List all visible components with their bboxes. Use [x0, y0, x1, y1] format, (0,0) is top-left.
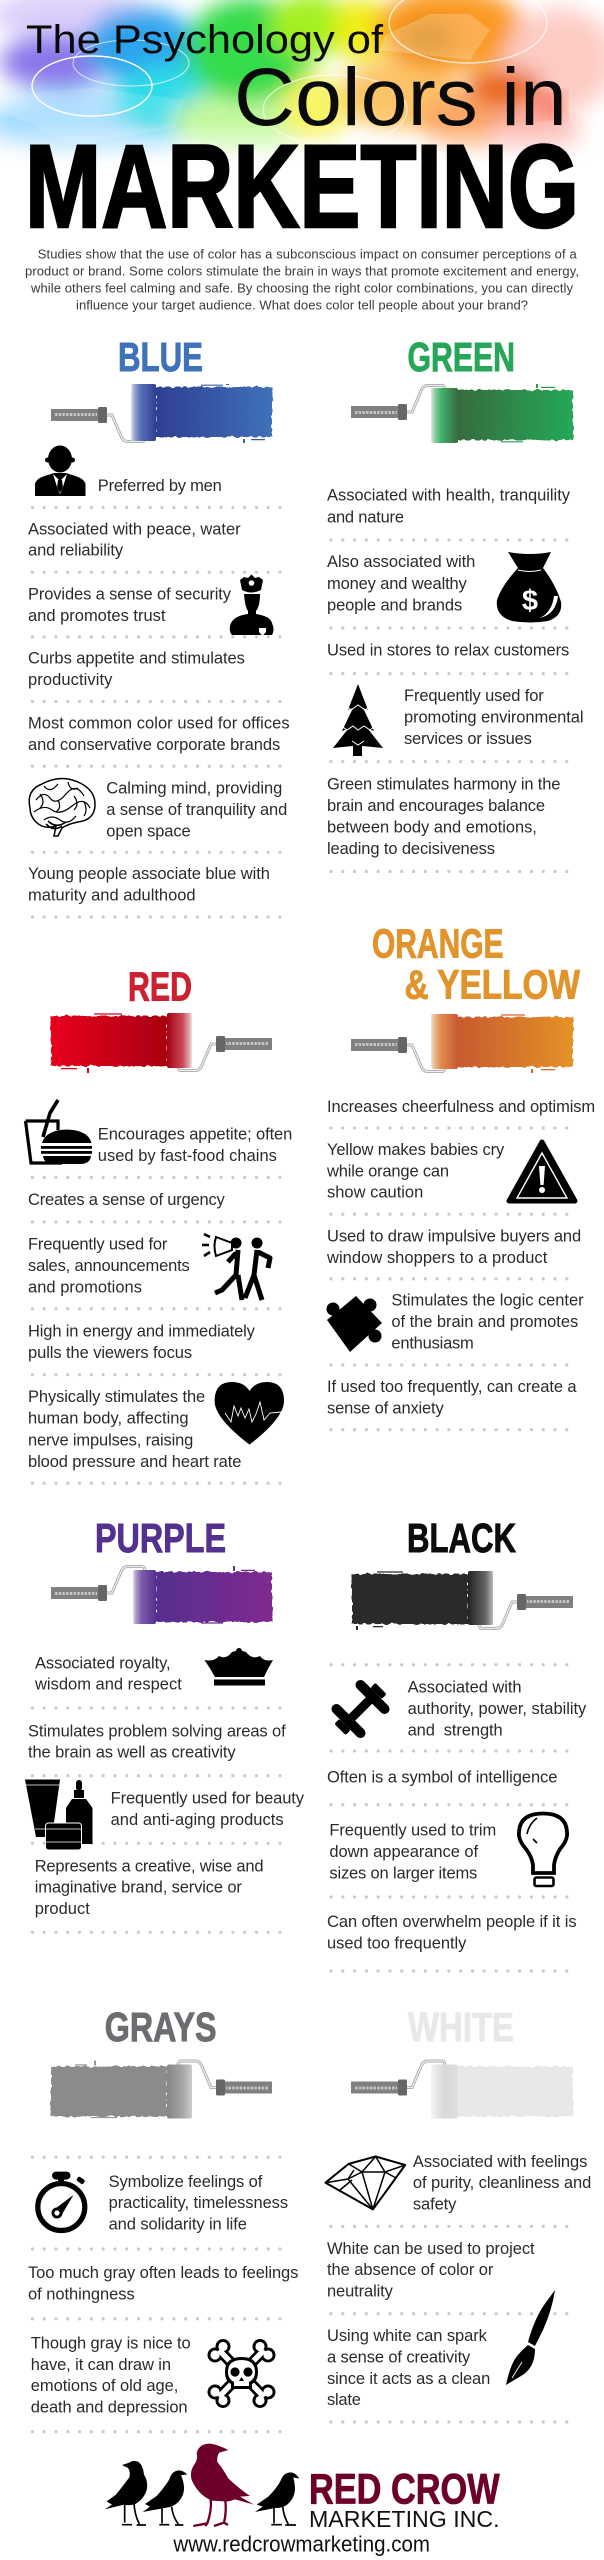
text: money: Also associated with	[327, 553, 475, 571]
heading: blue: BLUE	[118, 334, 203, 380]
text: impulsive	[326, 1227, 581, 1267]
icon: large red crow	[191, 2444, 254, 2526]
text: beauty	[111, 1790, 305, 1829]
icon: diamond	[326, 2156, 405, 2209]
text: security: and promotes trust	[28, 607, 166, 625]
heading: grays: GRAYS	[105, 2004, 216, 2050]
icon: paint brush	[506, 2290, 555, 2385]
text: nothingness: of nothingness	[28, 2286, 135, 2304]
text: purity: safety	[413, 2195, 457, 2213]
text: creativity: slate	[327, 2391, 361, 2409]
text: environmental: promoting environmental	[404, 709, 584, 727]
text: urgency: Creates a sense of urgency	[28, 1191, 226, 1209]
text: overwhelm: used too frequently	[327, 1934, 467, 1952]
text: peace: Associated with peace, water	[28, 520, 241, 538]
panel: green	[327, 334, 584, 872]
text: anxiety: If used too frequently, can create a	[327, 1378, 577, 1396]
text: physically: human body, affecting	[28, 1410, 189, 1428]
text: logic: Stimulates the logic center	[391, 1292, 584, 1310]
text: physically: blood pressure and heart rate	[28, 1453, 241, 1471]
text: creative: product	[35, 1900, 90, 1918]
heading: green: GREEN	[408, 334, 515, 380]
text: sales: Frequently used for	[28, 1235, 168, 1253]
text: appetite: Curbs appetite and stimulates	[28, 650, 245, 668]
text: purity	[413, 2153, 591, 2213]
text: practicality: Symbolize feelings of	[109, 2173, 263, 2191]
text: babies: Yellow makes babies cry	[327, 1141, 505, 1159]
text: trim	[329, 1822, 496, 1882]
text: logic: of the brain and promotes	[391, 1313, 578, 1331]
text: old age: emotions of old age,	[31, 2377, 178, 2395]
text: money: people and brands	[327, 596, 462, 614]
icon: crow 2	[143, 2470, 187, 2525]
paint roller: white	[351, 2061, 573, 2118]
text: beauty: Frequently used for beauty	[111, 1790, 305, 1808]
text: royalty	[34, 1654, 182, 1694]
icon: police officer	[230, 574, 274, 636]
text: young people: maturity and adulthood	[28, 886, 196, 904]
icon: fast food	[26, 1100, 92, 1164]
text: harmony	[327, 776, 560, 858]
intro paragraph: product or brand. Some colors stimulate the brain in ways that promote excitement and energy,	[25, 264, 579, 279]
text: beauty: and anti-aging products	[111, 1811, 284, 1829]
icon: pine tree	[333, 684, 383, 756]
panel: blue	[28, 334, 290, 917]
text: stores: Used in stores to relax customers	[327, 642, 569, 660]
text: appetite	[28, 650, 245, 689]
text: health: Associated with health, tranquility	[327, 487, 571, 505]
panel: red	[26, 963, 292, 1483]
text: trim: sizes on larger items	[329, 1864, 477, 1882]
text: trim: down appearance of	[329, 1843, 479, 1861]
intro paragraph	[25, 246, 579, 313]
text: intelligence: Often is a symbol of intelligence	[327, 1769, 557, 1787]
text: impulsive: Used to draw impulsive buyers and	[327, 1227, 581, 1245]
intro paragraph: while others feel calming and safe. By choosing the right color combinations, you can directly	[30, 281, 574, 296]
text: harmony: between body and emotions,	[327, 818, 537, 836]
text: energy: High in energy and immediately	[28, 1323, 256, 1341]
text: encourages appetite	[98, 1126, 292, 1165]
text: security: Provides a sense of security	[28, 585, 232, 603]
text: sales: and promotions	[28, 1278, 142, 1296]
text: encourages appetite: used by fast-food chains	[98, 1147, 277, 1165]
heading: red: RED	[128, 963, 192, 1009]
text: offices: Most common color used for offices	[28, 714, 290, 732]
title: The Psychology of	[26, 18, 384, 62]
paint roller: red	[51, 1013, 272, 1073]
icon: warning sign	[509, 1142, 575, 1201]
panel: white	[326, 2004, 591, 2422]
icon: crow 1	[105, 2461, 147, 2525]
text: problem solving	[28, 1722, 286, 1762]
icon: dumbbell	[324, 1673, 397, 1745]
icon: businessman	[35, 446, 86, 496]
title: Colors in	[234, 52, 567, 143]
text: calming: open space	[106, 822, 191, 840]
text: creativity: since it acts as a clean	[327, 2370, 490, 2388]
text: purity: of purity, cleanliness and	[413, 2174, 591, 2192]
text: energy: pulls the viewers focus	[28, 1344, 192, 1362]
heading: orange and yellow	[372, 920, 580, 1008]
website url: www.redcrowmarketing.com	[172, 2532, 430, 2557]
text: peace	[28, 520, 241, 560]
panel: black	[324, 1515, 587, 1971]
text: anxiety: sense of anxiety	[327, 1400, 444, 1418]
text: problem solving: the brain as well as creativity	[28, 1744, 236, 1762]
text: environmental: Frequently used for	[404, 687, 544, 705]
heading: orange and yellow: ORANGE	[372, 920, 504, 966]
intro paragraph: Studies show that the use of color has a subconscious impact on consumer perceptions of a	[38, 246, 577, 261]
paint roller: orange	[351, 1014, 573, 1073]
text: money: money and wealthy	[327, 575, 468, 593]
paint roller: purple	[51, 1566, 272, 1624]
logo: red crow marketing	[105, 2444, 500, 2557]
text: trim: Frequently used to trim	[329, 1822, 496, 1840]
text: neutrality: White can be used to project	[327, 2240, 535, 2258]
text: environmental: services or issues	[404, 730, 532, 748]
text: sales: sales, announcements	[28, 1257, 190, 1275]
icon: people with megaphone	[202, 1234, 270, 1300]
text: logic: enthusiasm	[391, 1334, 474, 1352]
text: authority: Associated with	[408, 1679, 522, 1697]
text: practicality: practicality, timelessness	[109, 2194, 288, 2212]
text: babies: show caution	[327, 1184, 423, 1202]
text: authority	[408, 1679, 587, 1739]
text: authority: authority, power, stability	[408, 1700, 587, 1718]
text: royalty: wisdom and respect	[34, 1676, 182, 1694]
text: babies	[326, 1141, 505, 1202]
text: neutrality: the absence of color or	[327, 2261, 494, 2279]
heading: purple: PURPLE	[95, 1515, 226, 1561]
text: creative	[35, 1857, 264, 1918]
text: health	[327, 487, 571, 526]
text: physically	[28, 1388, 241, 1471]
text: physically: Physically stimulates the	[28, 1388, 205, 1406]
icon: stopwatch	[38, 2172, 85, 2230]
text: nothingness	[28, 2264, 298, 2304]
company name: RED CROW	[309, 2466, 500, 2514]
icon: money bag: $	[522, 585, 538, 617]
text: overwhelm: Can often overwhelm people if it is	[327, 1913, 577, 1931]
title	[25, 18, 579, 253]
heading: black: BLACK	[407, 1515, 516, 1561]
text: babies: while orange can	[326, 1162, 449, 1180]
text: calming: a sense of tranquility and	[106, 801, 287, 819]
text: peace: and reliability	[28, 542, 124, 560]
text: harmony: Green stimulates harmony in the	[327, 776, 560, 794]
text: health: and nature	[327, 508, 404, 526]
background: rainbow header	[0, 0, 604, 192]
text: cheerfulness: Increases cheerfulness and optimism	[327, 1098, 595, 1116]
text: appetite: productivity	[28, 671, 113, 689]
intro paragraph: influence your target audience. What does color tell people about your brand?	[76, 298, 528, 313]
text: purity: Associated with feelings	[413, 2153, 587, 2171]
icon: cosmetics	[25, 1780, 92, 1850]
icon: money bag	[497, 552, 561, 622]
text: environmental	[404, 687, 584, 748]
text: encourages appetite: Encourages appetite; often	[98, 1126, 292, 1144]
text: creative: Represents a creative, wise and	[35, 1857, 264, 1875]
text: offices: and conservative corporate brands	[28, 736, 280, 754]
text: creativity: Using white can spark	[327, 2327, 488, 2345]
text: young people: Young people associate blue with	[28, 865, 270, 883]
text: security	[28, 585, 232, 625]
paint roller: black	[352, 1571, 573, 1630]
icon: crow 4	[255, 2472, 299, 2525]
text: old age: have, it can draw in	[31, 2356, 171, 2374]
text: harmony: leading to decisiveness	[327, 840, 495, 858]
company subtitle: MARKETING INC.	[309, 2506, 500, 2532]
text: impulsive: window shoppers to a product	[326, 1249, 548, 1267]
panel: grays	[28, 2004, 298, 2432]
text: young people	[28, 865, 270, 904]
text: creativity: a sense of creativity	[327, 2348, 471, 2366]
text: authority: and strength	[408, 1721, 503, 1739]
text: creativity	[327, 2327, 490, 2409]
icon: heart with pulse	[215, 1382, 284, 1445]
text: money	[327, 553, 475, 614]
icon: skull and crossbones	[208, 2339, 276, 2408]
heading: white: WHITE	[408, 2004, 514, 2050]
text: nothingness: Too much gray often leads to feelings	[28, 2264, 298, 2282]
text: preferred by men: Preferred by men	[98, 477, 222, 495]
paint roller: grays	[51, 2060, 272, 2118]
text: creative: imaginative brand, service or	[35, 1879, 242, 1897]
paint roller: green	[351, 384, 573, 443]
text: neutrality	[327, 2240, 535, 2301]
text: old age: death and depression	[31, 2398, 188, 2416]
icon: light bulb	[519, 1814, 567, 1886]
text: neutrality: neutrality	[327, 2283, 394, 2301]
text: overwhelm	[327, 1913, 577, 1952]
text: anxiety	[327, 1378, 577, 1418]
icon: brain	[29, 778, 95, 836]
text: physically: nerve impulses, raising	[28, 1431, 193, 1449]
text: royalty: Associated royalty,	[35, 1654, 171, 1672]
text: logic	[391, 1292, 584, 1352]
text: calming	[106, 779, 287, 840]
panel: purple	[25, 1515, 305, 1932]
text: old age: Though gray is nice to	[31, 2334, 191, 2352]
icon: puzzle piece	[326, 1296, 382, 1352]
text: offices	[28, 714, 290, 754]
icon: crown	[204, 1648, 273, 1686]
text: harmony: brain and encourages balance	[327, 797, 545, 815]
text: practicality	[109, 2173, 288, 2233]
text: practicality: and solidarity in life	[109, 2215, 247, 2233]
text: calming: Calming mind, providing	[106, 779, 282, 797]
paint roller: blue	[51, 384, 272, 443]
text: old age	[31, 2334, 191, 2416]
text: problem solving: Stimulates problem solving areas of	[28, 1722, 286, 1740]
panel: orange and yellow	[326, 920, 595, 1430]
text: sales	[28, 1235, 190, 1296]
text: energy	[28, 1323, 256, 1362]
